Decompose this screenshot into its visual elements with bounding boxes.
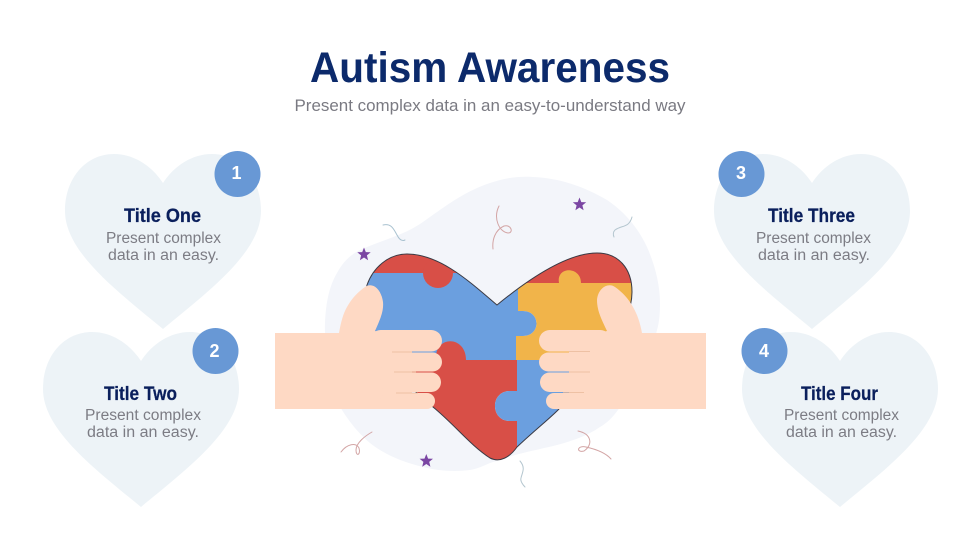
central illustration [275,177,706,487]
body text three: Present complex [756,230,871,247]
number badge three: 3 [736,163,746,183]
heart background four [742,332,938,507]
number badge one [214,151,260,197]
body text three: data in an easy. [758,247,870,264]
number badge four [742,328,788,374]
panel: title one [65,151,261,329]
puzzle piece: yellow [516,270,632,360]
puzzle piece: red lower [412,341,517,460]
heading four: Title Four [801,384,879,405]
heart background three [714,154,910,329]
number badge two [192,328,238,374]
title: Autism Awareness [310,44,670,92]
body text two: Present complex [85,407,201,424]
puzzle heart [366,252,632,460]
panel: title two [43,328,239,507]
heading one: Title One [124,206,201,227]
puzzle piece: blue left [367,273,536,360]
panel: title four [742,328,938,507]
squiggles [341,206,632,487]
number badge four: 4 [759,341,769,361]
number badge three [718,151,764,197]
puzzle piece: red top [374,254,631,288]
number badge one: 1 [231,163,242,183]
panel: title three [714,151,910,329]
number badge two: 2 [209,341,220,361]
stars [357,198,586,467]
body text two: data in an easy. [87,424,199,441]
left hand [275,285,442,409]
heart background one [65,154,261,329]
body text four: Present complex [784,407,899,424]
heading two: Title Two [104,384,177,405]
heart background two [43,332,239,507]
body text four: data in an easy. [786,424,897,441]
body text one: Present complex [106,230,221,247]
heart outline [366,253,632,460]
subtitle: Present complex data in an easy-to-understand way [294,96,686,115]
body text one: data in an easy. [108,247,219,264]
heading three: Title Three [768,206,855,227]
right hand [539,285,706,409]
puzzle piece: blue lower [495,360,569,446]
background blob [325,177,660,471]
